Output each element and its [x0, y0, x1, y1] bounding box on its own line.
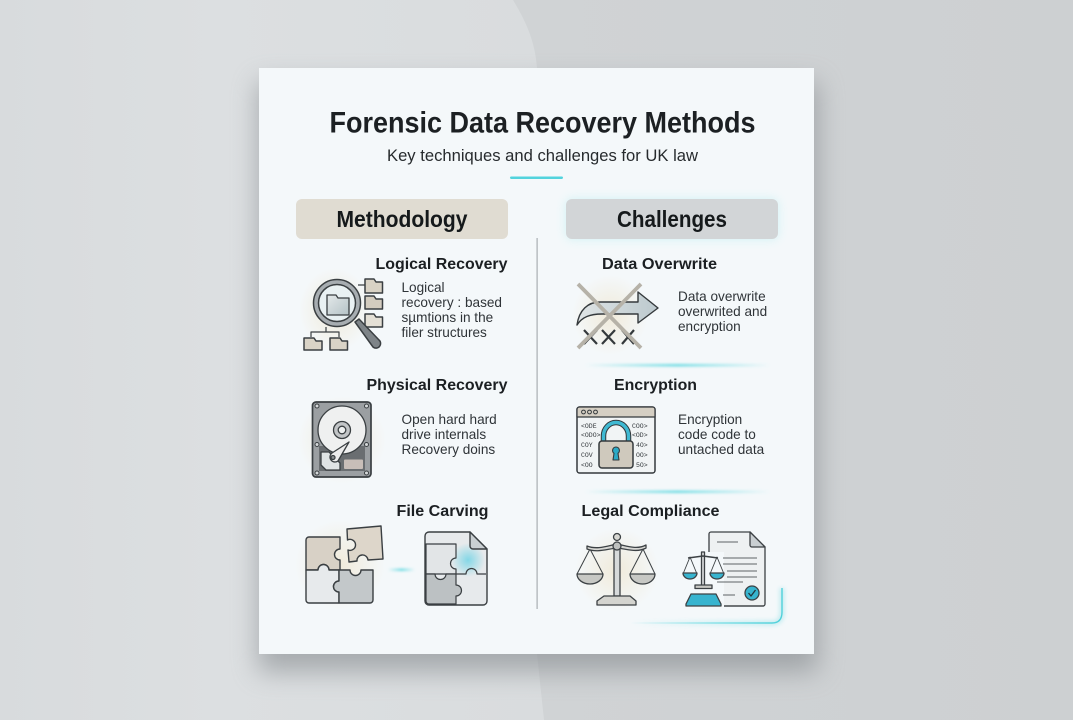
heading: Encryption: Encryption: [614, 377, 697, 394]
text: physical description: Open hard hard: [402, 412, 497, 427]
text: logical description: recovery : based: [402, 295, 502, 310]
glow divider: [585, 364, 770, 366]
icon: crossed-out arrow: [572, 275, 658, 355]
text: encryption description: Encryption: [678, 412, 742, 427]
heading: Challenges: [566, 199, 778, 239]
title: Forensic Data Recovery Methods: [330, 106, 756, 140]
title accent line: [510, 176, 563, 179]
text: logical description: Logical: [402, 280, 445, 295]
code text: COO>: [632, 423, 648, 430]
icon: legal document with scales: [680, 532, 765, 608]
text: overwrite description: Data overwrite: [678, 289, 766, 304]
connector line: [388, 568, 415, 571]
heading: Logical Recovery: Logical Recovery: [376, 256, 508, 273]
heading: Methodology: [296, 199, 508, 239]
code text: OO>: [636, 452, 648, 459]
text: overwrite description: encryption: [678, 319, 741, 334]
code text: <OD>: [632, 432, 648, 439]
icon: puzzle pieces: [295, 520, 385, 610]
column divider: [536, 238, 538, 609]
text: physical description: drive internals: [402, 427, 486, 442]
heading: Methodology: Methodology: [336, 206, 468, 232]
heading: File Carving: File Carving: [396, 503, 488, 520]
text: physical description: Recovery doins: [402, 442, 495, 457]
item: Data Overwrite: [572, 256, 770, 366]
code text: <ODO>: [581, 432, 601, 439]
heading: Physical Recovery: Physical Recovery: [366, 377, 508, 394]
code text: COV: [581, 452, 593, 459]
corner glow accent: [630, 588, 782, 623]
heading: Challenges: Challenges: [617, 206, 727, 232]
code text: <ODE: [581, 423, 597, 430]
heading: Data Overwrite: Data Overwrite: [602, 256, 717, 273]
text: logical description: sµmtions in the: [402, 310, 493, 325]
panel: main card: [259, 68, 814, 654]
card shadow: [258, 82, 818, 672]
text: logical description: filer structures: [402, 325, 487, 340]
subtitle: Key techniques and challenges for UK law: [387, 147, 698, 165]
item: Logical Recovery: [299, 256, 508, 352]
item: Legal Compliance: [575, 503, 782, 623]
code text: <OO: [581, 462, 593, 469]
text: overwrite description: overwrited and: [678, 304, 767, 319]
icon: hard drive: [298, 396, 386, 484]
icon: file with puzzle: [425, 532, 487, 605]
code text: 4O>: [636, 442, 648, 449]
panel: methodology column: [295, 199, 508, 610]
text: encryption description: untached data: [678, 442, 765, 457]
text: encryption description: code code to: [678, 427, 756, 442]
item: Encryption: [577, 377, 770, 493]
panel: challenges column: [566, 199, 782, 623]
code text: [581, 423, 648, 469]
code text: COY: [581, 442, 593, 449]
icon: magnifier with folders: [299, 268, 382, 352]
code text: 5O>: [636, 462, 648, 469]
glow divider: [585, 490, 770, 493]
heading: Legal Compliance: Legal Compliance: [582, 503, 720, 520]
icon: scales of justice: [575, 528, 659, 612]
item: Physical Recovery: [298, 377, 508, 484]
icon: locked code window: [577, 407, 655, 473]
item: File Carving: [295, 503, 488, 610]
